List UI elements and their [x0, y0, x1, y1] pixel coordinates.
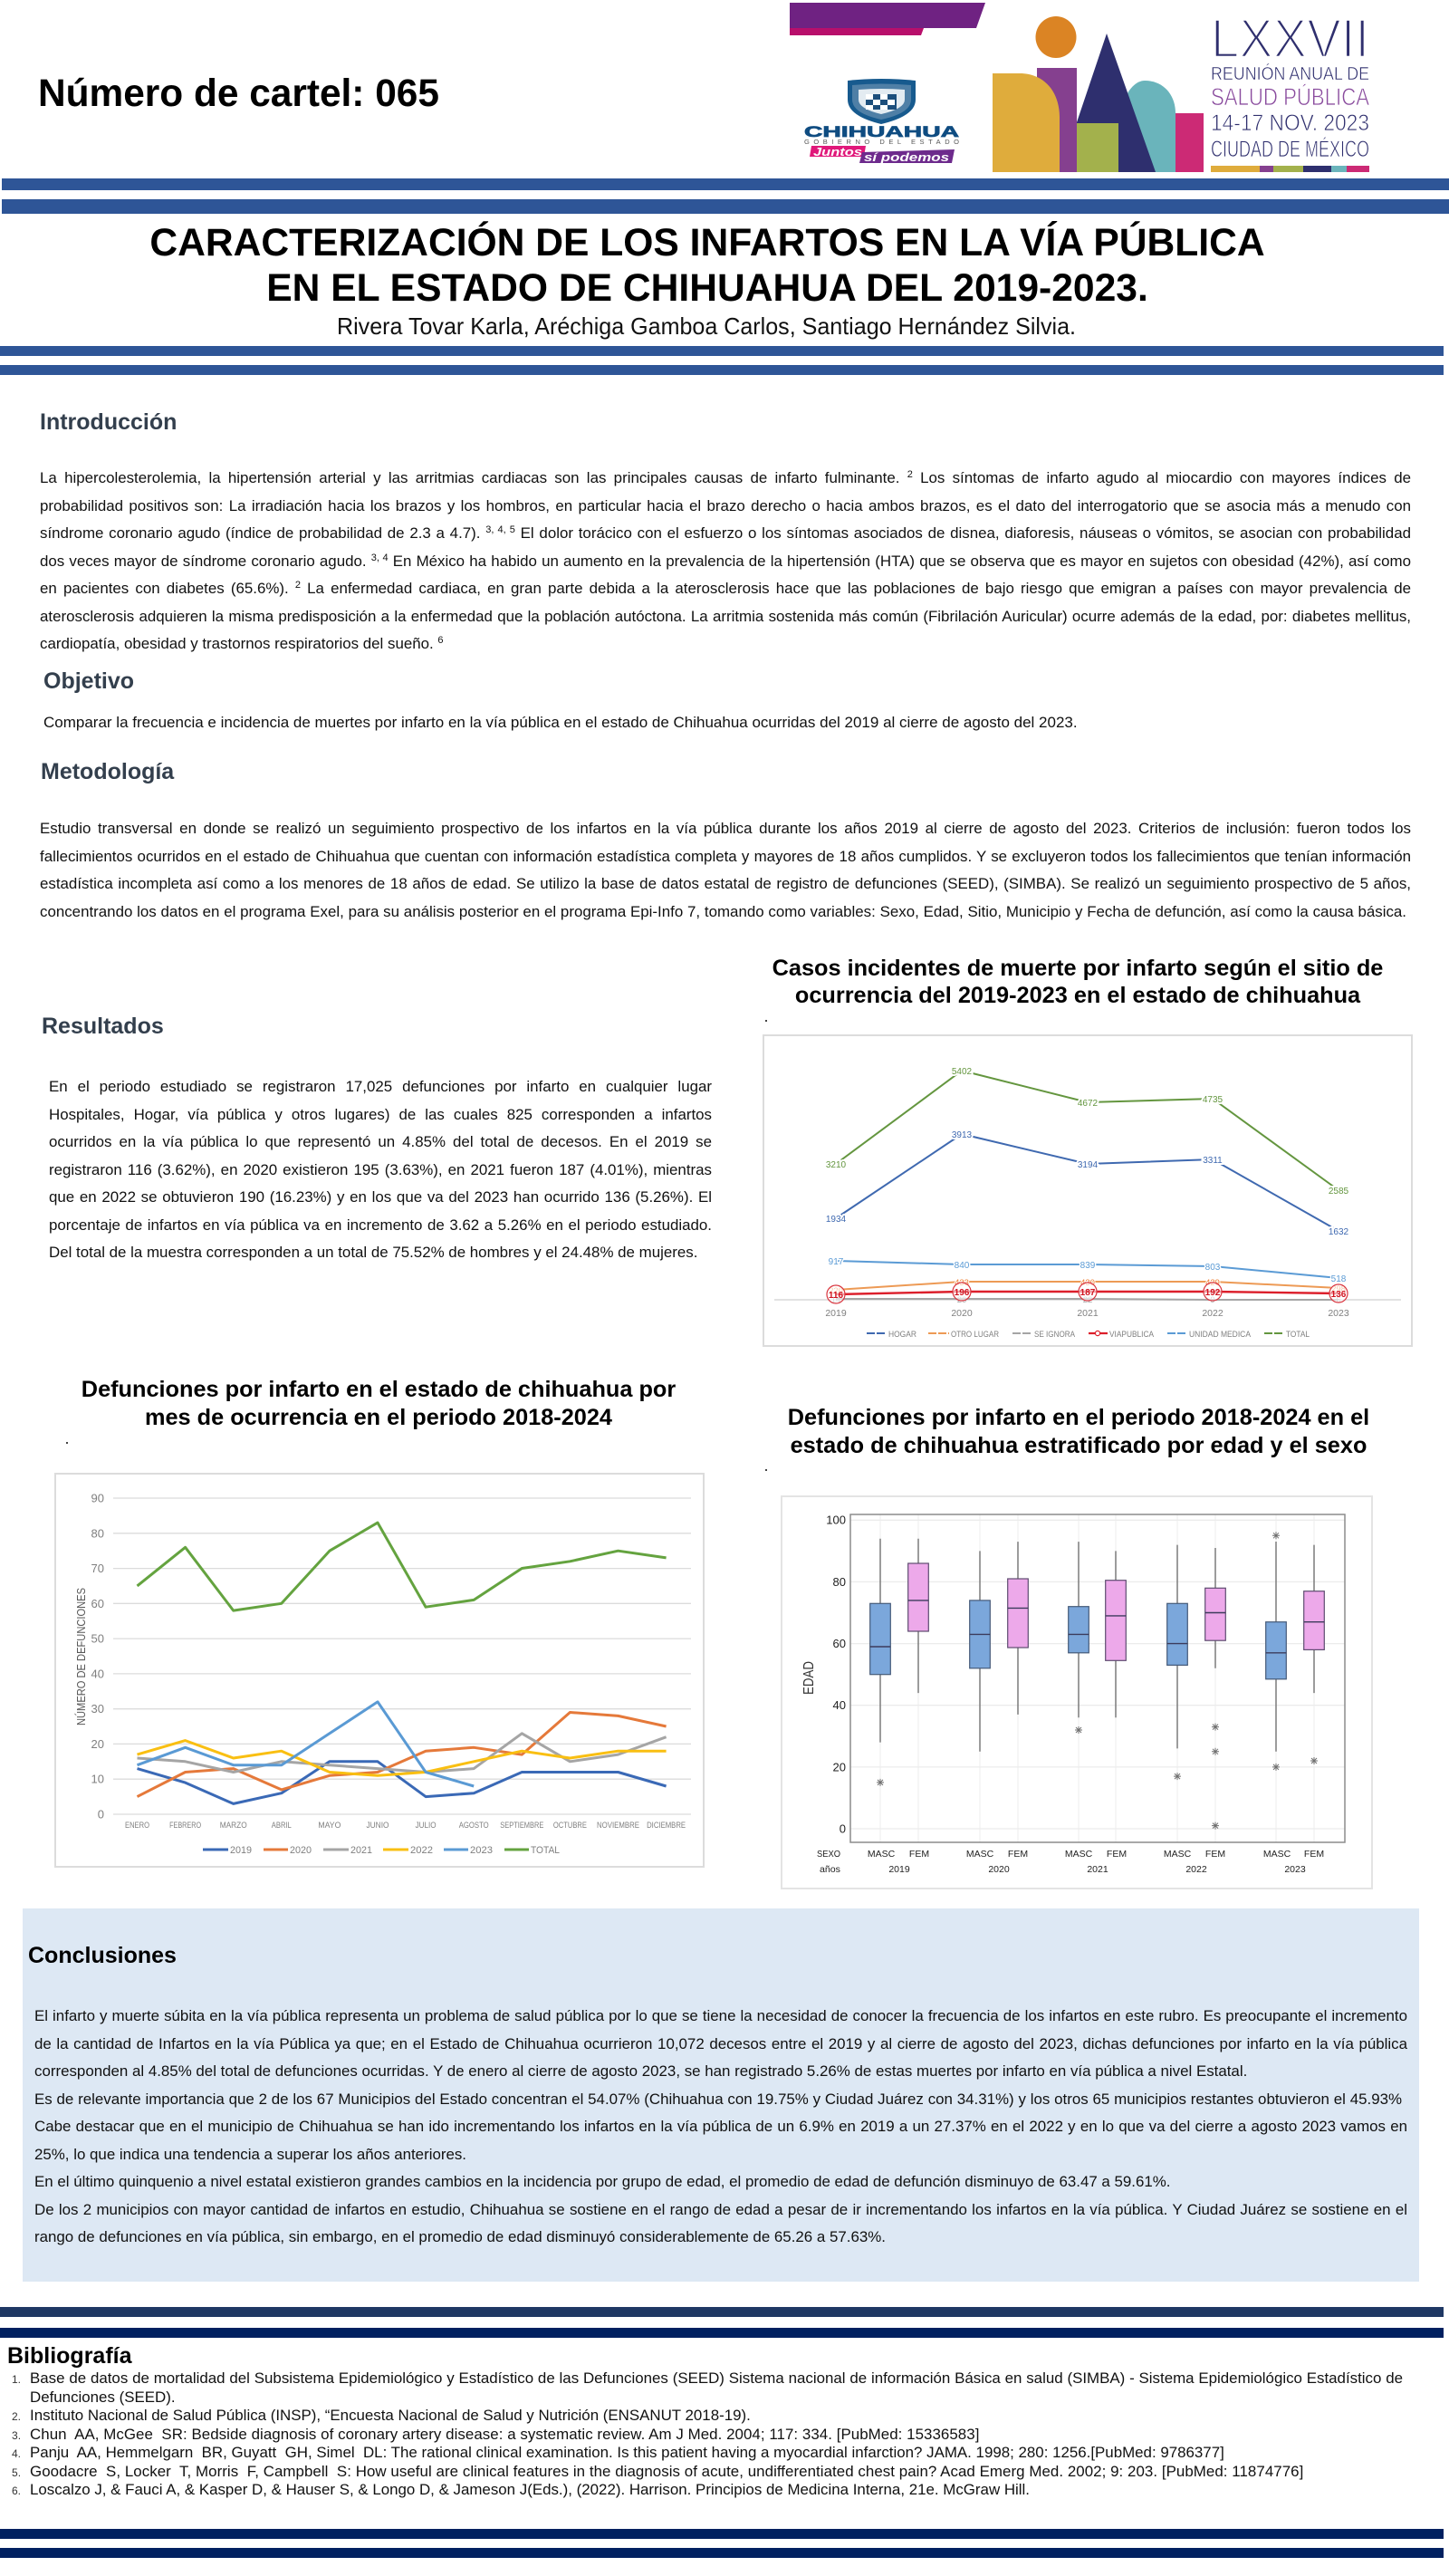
category labels: MASC [1164, 1849, 1192, 1860]
heading: chart edad y sexo [788, 1405, 1369, 1458]
series: UNIDAD MEDICA: 839 [1080, 1261, 1096, 1271]
text block: resultados: que en 2022 se obtuvieron 190 (16.23%) y en los que va del 2023 han ocurrido 136 (5.26%). El [49, 1188, 712, 1206]
text block: introducción: síndrome coronario agudo (índice de probabilidad de 2.3 a 4.7). 3, 4, 5 El dolor torácico con el esfuerzo o los síntomas asociados de disnea, diaforesis, náuseas o vómitos, se asocian con probabilidad [40, 524, 1411, 542]
icon: state shield [848, 79, 916, 124]
y axis labels [826, 1513, 846, 1835]
month labels: JULIO [416, 1821, 437, 1830]
boxes masculino [870, 1600, 1286, 1679]
logo: Gobierno del Estado de Chihuahua [804, 79, 959, 164]
legend: TOTAL [531, 1845, 560, 1856]
text block: resultados: Hospitales, Hogar, vía pública y otros lugares) de las cuales 825 corresponden a infartos [49, 1105, 712, 1123]
category labels: MASC [868, 1849, 896, 1860]
month labels: AGOSTO [459, 1821, 489, 1830]
legend [867, 1330, 1310, 1340]
text block: resultados: registraron 116 (3.62%), en 2020 existieron 195 (3.63%), en 2021 fueron 187 (4.01%), mientras [49, 1161, 712, 1177]
text block: introducción [40, 469, 1411, 652]
poster number: Número de cartel: 065 [38, 72, 439, 114]
text block: introducción: aterosclerosis adquieren la misma predisposición a la enfermedad que la población autóctona. La arritmia sostenida más común (Fibrilación Auricular) ocurre además de la edad, por: diabetes mellitus, [40, 607, 1411, 625]
y axis labels: 90 [91, 1491, 104, 1505]
category labels: FEM [1205, 1849, 1225, 1860]
line chart: defunciones por mes [54, 1473, 705, 1868]
text block: objetivo: Comparar la frecuencia e incidencia de muertes por infarto en la vía pública en el estado de Chihuahua ocurridas del 2019 al cierre de agosto del 2023. [43, 714, 1078, 731]
category labels: 2022 [1185, 1864, 1207, 1875]
color stripe [1211, 166, 1369, 172]
category labels: FEM [1304, 1849, 1324, 1860]
heading: Objetivo: Objetivo [43, 668, 134, 694]
category labels: FEM [1008, 1849, 1028, 1860]
series: HOGAR: 3311 [1203, 1156, 1223, 1166]
series: VIAPUBLICA: 196 [955, 1288, 970, 1298]
month labels: DICIEMBRE [647, 1821, 686, 1830]
y axis title: NÚMERO DE DEFUNCIONES [74, 1588, 88, 1725]
series: UNIDAD MEDICA [829, 1257, 1347, 1284]
text block: conclusiones: De los 2 municipios con mayor cantidad de infartos en estudio, Chihuahua se sostiene en el rango de edad a pesar de ir incrementando los infartos en la vía pública. Y Ciudad Juárez se sostiene en el [34, 2201, 1407, 2217]
text block: conclusiones: rango de defunciones en vía pública, sin embargo, en el promedio de edad disminuyó considerablemente de 65.26 a 57.63%. [34, 2228, 886, 2245]
y axis labels: 100 [826, 1513, 846, 1527]
text: 1. [12, 2373, 21, 2386]
text block: resultados: porcentaje de infartos en vía pública va en incremento de 3.62 a 5.26% en el periodo estudiado. [49, 1216, 712, 1234]
heading: Resultados: Resultados [42, 1014, 164, 1039]
series: OTRO LUGAR: 433 [955, 1278, 969, 1288]
month labels: MARZO [220, 1821, 247, 1830]
y axis labels: 70 [91, 1562, 104, 1575]
text block: conclusiones: El infarto y muerte súbita en la vía pública representa un problema de salud pública por lo que se tiene la necesidad de conocer la frecuencia de los infartos en este rubro. Es preocupante el incremento [34, 2007, 1407, 2024]
authors: Rivera Tovar Karla, Aréchiga Gamboa Carlos, Santiago Hernández Silvia. [337, 312, 1076, 340]
category labels: MASC [1263, 1849, 1291, 1860]
series: HOGAR: 1934 [826, 1215, 847, 1225]
month labels: JUNIO [366, 1821, 389, 1830]
text block: resultados: En el periodo estudiado se registraron 17,025 defunciones por infarto en cualquier lugar [49, 1078, 712, 1095]
references list [12, 2369, 1403, 2498]
heading: Bibliografía: Bibliografía [7, 2343, 132, 2369]
line chart: casos por sitio de ocurrencia [763, 1034, 1413, 1347]
series: UNIDAD MEDICA: 840 [955, 1261, 970, 1271]
text block: introducción: dos veces mayor de síndrome coronario agudo. 3, 4 En México ha habido un aumento en la prevalencia de la hipertensión (HTA) que se observa que es mayor en sujetos con obesidad (42%), así como [40, 553, 1411, 569]
heading: Metodología: Metodología [41, 759, 174, 784]
title [149, 221, 1265, 310]
references list: Base de datos de mortalidad del Subsistema Epidemiológico y Estadístico de las Defunciones (SEED) Sistema nacional de información Básica en salud (SIMBA) - Sistema Epidemiológico Estadístico de Defunciones (SEED). [30, 2369, 1403, 2406]
text block: metodología: estadística incompleta así como a los menores de 18 años de edad. Se utilizo la base de datos estatal de registro de defunciones (SEED), (SIMBA). Se realizó un seguimiento prospectivo de 5 años, [40, 875, 1411, 892]
y axis labels: 30 [91, 1702, 104, 1716]
series: SE IGNORA: 14 [831, 1295, 840, 1305]
series: HOGAR [826, 1130, 1349, 1237]
month labels [125, 1821, 686, 1830]
series: OTRO LUGAR: 298 [1331, 1284, 1346, 1294]
series: UNIDAD MEDICA: 518 [1331, 1274, 1347, 1284]
series: SE IGNORA [831, 1295, 1341, 1305]
heading: chart sitio de ocurrencia: Casos incidentes de muerte por infarto según el sitio de [772, 956, 1383, 981]
y axis labels: 0 [98, 1808, 104, 1821]
text block: introducción: probabilidad positivos son: La irradiación hacia los brazos y los hombros, en particular hacia el brazo derecho o hacia ambos brazos, es el dato del interrogatorio que se asocia más a menudo con [40, 496, 1411, 514]
event number: LXXVII [1211, 8, 1369, 69]
category labels: MASC [1065, 1849, 1093, 1860]
category labels: 2021 [1087, 1864, 1108, 1875]
heading: chart por mes: mes de ocurrencia en el periodo 2018-2024 [145, 1405, 612, 1430]
legend: 2020 [290, 1845, 312, 1856]
legend: 2021 [350, 1845, 372, 1856]
category labels: FEM [1107, 1849, 1127, 1860]
text block: resultados [49, 1078, 712, 1261]
series: SE IGNORA: 20 [957, 1295, 966, 1305]
legend: OTRO LUGAR [951, 1330, 999, 1340]
series: HOGAR: 1632 [1329, 1227, 1349, 1237]
category labels: años [820, 1864, 840, 1875]
slogan part two: sí podemos [864, 150, 949, 164]
text: 5. [12, 2465, 21, 2478]
event dates: 14-17 NOV. 2023 [1211, 111, 1369, 136]
month labels: ABRIL [272, 1821, 292, 1830]
category labels [817, 1849, 1324, 1875]
outliers [877, 1532, 1318, 1830]
whiskers [880, 1539, 1314, 1752]
text block: conclusiones: Cabe destacar que en el municipio de Chihuahua se han ido incrementando los infartos en la vía pública de un 6.9% en 2019 a un 27.37% en el 2022 y en lo que va del cierre a agosto 2023 vamos en [34, 2118, 1407, 2135]
axis years: 2022 [1202, 1308, 1223, 1319]
legend: 2022 [410, 1845, 433, 1856]
legend: 2019 [230, 1845, 252, 1856]
text: 2. [12, 2410, 21, 2423]
text block: introducción: cardiopatía, obesidad y trastornos respiratorios del sueño. 6 [40, 635, 444, 652]
text block: introducción: La hipercolesterolemia, la hipertensión arterial y las arritmias cardiacas son las principales causas de infarto fulminante. 2 Los síntomas de infarto agudo al miocardio con mayores índices de [40, 469, 1411, 486]
text block: conclusiones: Es de relevante importancia que 2 de los 67 Municipios del Estado concentran el 54.07% (Chihuahua con 19.75% y Ciudad Juárez con 34.31%) y los otros 65 municipios restantes obtuvieron el 45.93% [34, 2091, 1402, 2107]
references list: Goodacre S, Locker T, Morris F, Campbell S: How useful are clinical features in the diagnosis of acute, undifferentiated chest pain? Acad Emerg Med. 2002; 9: 203. [PubMed: 11874776] [30, 2462, 1303, 2480]
legend: SE IGNORA [1034, 1330, 1076, 1340]
text: 4. [12, 2447, 21, 2460]
axis years: 2023 [1328, 1308, 1349, 1319]
series: OTRO LUGAR [829, 1278, 1346, 1296]
y axis labels: 40 [833, 1698, 846, 1712]
y axis labels: 20 [833, 1761, 846, 1773]
series: TOTAL: 4672 [1078, 1099, 1099, 1109]
text block: metodología: Estudio transversal en donde se realizó un seguimiento prospectivo de los infartos en la vía pública durante los años 2019 al cierre de agosto del 2023. Criterios de inclusión: fueron todos los [40, 820, 1411, 837]
series: OTRO LUGAR: 220 [829, 1286, 843, 1296]
slogan part one [810, 145, 866, 159]
axis years [825, 1308, 1349, 1319]
month labels: OCTUBRE [553, 1821, 587, 1830]
heading: Conclusiones: Conclusiones [28, 1943, 177, 1968]
series: TOTAL [826, 1067, 1349, 1197]
y axis labels: 80 [833, 1575, 846, 1589]
heading: chart sitio de ocurrencia [772, 956, 1383, 1008]
y axis labels: 40 [91, 1667, 104, 1681]
event name line one: REUNIÓN ANUAL DE [1211, 63, 1369, 84]
category labels: SEXO [817, 1849, 840, 1860]
logo: LXXVII Reunión Anual de Salud Pública [993, 8, 1369, 172]
y axis title: EDAD [801, 1661, 817, 1695]
text block: introducción: en pacientes con diabetes (65.6%). 2 La enfermedad cardiaca, en gran parte debida a la aterosclerosis hace que las poblaciones de bajo riesgo que emigran a países con mayor prevalencia de [40, 580, 1411, 597]
series: UNIDAD MEDICA: 803 [1205, 1263, 1221, 1273]
icon: colored geometric skyline [993, 16, 1204, 172]
series: TOTAL: 5402 [952, 1067, 973, 1077]
icon: purple and magenta flag [790, 3, 985, 35]
text block: conclusiones: corresponden al 4.85% del total de defunciones ocurridas. Y de enero al cierre de agosto 2023, se han registrado 5.26% de estas muertes por infarto en vía pública a nivel Estatal. [34, 2062, 1247, 2080]
series: SE IGNORA: 6 [1336, 1295, 1341, 1305]
y axis labels: 50 [91, 1632, 104, 1645]
references list: Chun AA, McGee SR: Bedside diagnosis of coronary artery disease: a systematic review. Am J Med. 2004; 117: 334. [PubMed: 15336583] [30, 2426, 979, 2442]
y axis labels: 80 [91, 1527, 104, 1540]
legend: UNIDAD MEDICA [1189, 1330, 1252, 1340]
y axis labels: 60 [833, 1637, 846, 1650]
month labels: MAYO [318, 1821, 341, 1830]
text block: conclusiones: En el último quinquenio a nivel estatal existieron grandes cambios en la incidencia por grupo de edad, el promedio de edad de defunción disminuyo de 63.47 a 59.61%. [34, 2173, 1170, 2190]
boxplot: edad por sexo y año [781, 1495, 1373, 1889]
slogan part one: Juntos [813, 145, 862, 159]
axis years: 2020 [951, 1308, 973, 1319]
category labels: 2019 [888, 1864, 910, 1875]
slogan part two [859, 149, 955, 164]
text block: metodología: concentrando los datos en el programa Exel, para su análisis posterior en el programa Epi-Info 7, tomando como variables: Sexo, Edad, Sitio, Municipio y Fecha de defunción, así como la causa básica. [40, 903, 1406, 920]
legend [203, 1845, 560, 1856]
series: HOGAR: 3913 [952, 1130, 973, 1140]
heading: chart edad y sexo: Defunciones por infarto en el periodo 2018-2024 en el [788, 1405, 1369, 1430]
legend: 2023 [470, 1845, 493, 1856]
heading: Introducción: Introducción [40, 409, 177, 435]
series: SE IGNORA: 9 [1210, 1295, 1215, 1305]
legend: VIAPUBLICA [1109, 1330, 1155, 1340]
y axis labels: 60 [91, 1597, 104, 1610]
heading: chart por mes [82, 1377, 676, 1430]
text block: metodología: fallecimientos ocurridos en el estado de Chihuahua que cuentan con información estadística completa y mayores de 18 años cumplidos. Y se excluyeron todos los fallecimientos que tenían información [40, 848, 1411, 865]
series: TOTAL: 3210 [826, 1160, 847, 1170]
text block: metodología [40, 820, 1411, 920]
references list: Instituto Nacional de Salud Pública (INSP), “Encuesta Nacional de Salud y Nutrición (ENSANUT 2018-19). [30, 2407, 751, 2424]
series: VIAPUBLICA: 136 [1331, 1290, 1347, 1300]
series: OTRO LUGAR: 430 [1080, 1278, 1095, 1288]
month labels: ENERO [125, 1821, 149, 1830]
text block: conclusiones: de la cantidad de Infartos en la vía Pública ya que; en el Estado de Chihuahua ocurrieron 10,072 decesos entre el 2019 y al cierre de agosto del 2023, dichas defunciones por infarto en la vía pública [34, 2034, 1407, 2052]
series: TOTAL: 2585 [1329, 1187, 1349, 1197]
text block: resultados: ocurridos en la vía pública lo que representó un 4.85% del total de decesos. En el 2019 se [49, 1133, 712, 1150]
text: 3. [12, 2429, 21, 2442]
series: VIAPUBLICA: 187 [1080, 1288, 1096, 1298]
logo wordmark: CHIHUAHUA [804, 123, 959, 140]
month labels: SEPTIEMBRE [500, 1821, 543, 1830]
title: CARACTERIZACIÓN DE LOS INFARTOS EN LA VÍA PÚBLICA [149, 221, 1265, 264]
series: HOGAR: 3194 [1078, 1160, 1099, 1170]
y axis labels: 20 [91, 1737, 104, 1751]
category labels: 2023 [1284, 1864, 1306, 1875]
series: UNIDAD MEDICA: 917 [829, 1257, 844, 1267]
text: 6. [12, 2485, 21, 2497]
panel: conclusiones [23, 1908, 1419, 2282]
text block: conclusiones [34, 2007, 1407, 2245]
heading: chart sitio de ocurrencia: ocurrencia del 2019-2023 en el estado de chihuahua [795, 983, 1360, 1008]
y axis labels [91, 1491, 104, 1821]
category labels: 2020 [988, 1864, 1010, 1875]
category labels: MASC [966, 1849, 994, 1860]
text block: resultados: Del total de la muestra corresponden a un total de 75.52% de hombres y el 24.48% de mujeres. [49, 1244, 697, 1261]
references list: Panju AA, Hemmelgarn BR, Guyatt GH, Simel DL: The rational clinical examination. Is this patient having a myocardial infarction? JAMA. 1998; 280: 1256.[PubMed: 9786377] [30, 2444, 1224, 2461]
series: VIAPUBLICA [827, 1283, 1348, 1303]
category labels: FEM [909, 1849, 929, 1860]
series: TOTAL: 4735 [1203, 1095, 1223, 1105]
title: EN EL ESTADO DE CHIHUAHUA DEL 2019-2023. [266, 266, 1148, 310]
boxes femenino [908, 1563, 1324, 1660]
axis years: 2019 [825, 1308, 847, 1319]
series: OTRO LUGAR: 429 [1205, 1278, 1220, 1288]
series: VIAPUBLICA: 192 [1205, 1288, 1221, 1298]
legend: HOGAR [888, 1330, 916, 1340]
heading: chart edad y sexo: estado de chihuahua estratificado por edad y el sexo [791, 1433, 1367, 1458]
legend: TOTAL [1286, 1330, 1310, 1340]
logo subtitle: GOBIERNO DEL ESTADO [804, 138, 959, 146]
heading: chart por mes: Defunciones por infarto en el estado de chihuahua por [82, 1377, 676, 1402]
y axis labels: 0 [840, 1822, 846, 1835]
text block: conclusiones: 25%, lo que indica una tendencia a superar los años anteriores. [34, 2145, 466, 2163]
series: VIAPUBLICA: 116 [829, 1291, 844, 1301]
y axis labels: 10 [91, 1772, 104, 1786]
series: SE IGNORA: 22 [1083, 1295, 1092, 1305]
series lines [138, 1523, 667, 1803]
references list: Loscalzo J, & Fauci A, & Kasper D, & Hauser S, & Longo D, & Jameson J(Eds.), (2022). Harrison. Principios de Medicina Interna, 21e. McGraw Hill. [30, 2481, 1030, 2498]
event place: CIUDAD DE MÉXICO [1211, 136, 1369, 162]
month labels: FEBRERO [169, 1821, 201, 1830]
event name line two: SALUD PÚBLICA [1211, 82, 1369, 111]
axis years: 2021 [1077, 1308, 1099, 1319]
month labels: NOVIEMBRE [597, 1821, 639, 1830]
medians [870, 1600, 1324, 1653]
